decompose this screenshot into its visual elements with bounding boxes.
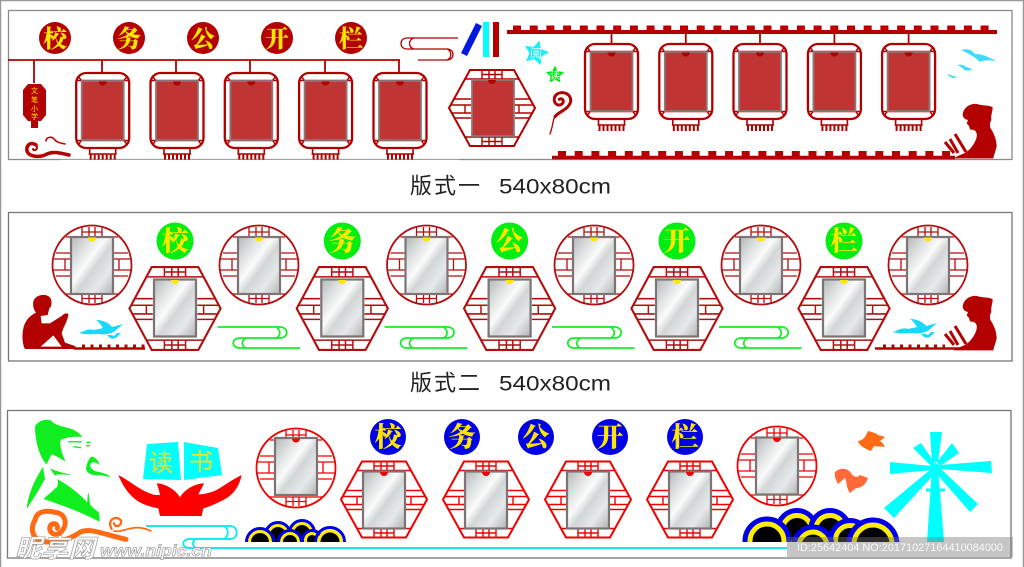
star badges: 读 bbox=[550, 69, 560, 82]
birds bbox=[947, 49, 997, 78]
green character beads: 公 bbox=[496, 226, 524, 256]
title band: red beads: 校 bbox=[43, 25, 69, 53]
blue character beads: 栏 bbox=[672, 422, 698, 452]
small lantern sign bbox=[23, 84, 46, 128]
round window frames bbox=[256, 426, 816, 508]
title band: red beads: 公 bbox=[191, 27, 216, 53]
wave scales right bbox=[742, 508, 900, 542]
title band: red beads: 务 bbox=[117, 26, 141, 53]
orange cloud bbox=[32, 511, 151, 542]
lanterns left row bbox=[76, 73, 426, 160]
round window frames bbox=[52, 226, 968, 304]
orange birds bbox=[835, 431, 885, 493]
title band: red beads: 开 bbox=[265, 26, 289, 53]
windmill bbox=[884, 432, 992, 542]
red swirl bbox=[550, 93, 571, 134]
scroll ornament bbox=[401, 38, 458, 60]
blue character beads: 公 bbox=[522, 422, 550, 452]
red cloud bbox=[27, 137, 69, 156]
book stripes bbox=[461, 22, 499, 57]
green character beads: 开 bbox=[664, 226, 690, 256]
small lantern sign: 笔 bbox=[31, 95, 38, 104]
caption one: 540x80cm bbox=[499, 176, 611, 198]
rail right bbox=[875, 346, 965, 348]
birds left bbox=[79, 320, 123, 339]
caption two: 540x80cm bbox=[499, 372, 611, 396]
green scrolls bbox=[218, 327, 802, 348]
caption one: 版式一 bbox=[410, 174, 482, 198]
cyan scroll bbox=[146, 526, 787, 548]
hexagon frame bbox=[449, 70, 535, 146]
panel: layout two bbox=[8, 212, 1012, 361]
blue character beads: 务 bbox=[448, 422, 476, 452]
open book bbox=[143, 442, 222, 480]
birds right bbox=[893, 319, 937, 338]
wave scales left bbox=[245, 519, 346, 542]
frame bottom mask bbox=[60, 160, 460, 166]
red lotus bbox=[118, 475, 242, 516]
scholar figure bbox=[27, 420, 111, 522]
small lantern sign: 学 bbox=[31, 112, 38, 121]
blue character beads bbox=[370, 419, 703, 455]
panel: layout one bbox=[8, 10, 1012, 166]
blue character beads: 开 bbox=[596, 422, 624, 452]
green character beads bbox=[156, 222, 862, 260]
boy reading silhouette bbox=[22, 295, 77, 349]
open book: 读 bbox=[149, 450, 173, 477]
watermark id bar: ID:25642404 NO:20171027164410084000 bbox=[797, 542, 1003, 554]
blue character beads: 校 bbox=[374, 422, 404, 452]
watermark logo: www.nipic.cn bbox=[100, 543, 212, 560]
girl reading silhouette bbox=[945, 296, 997, 350]
caption one bbox=[410, 174, 611, 198]
open book: 书 bbox=[189, 449, 213, 476]
bottom rail bbox=[552, 154, 955, 158]
small lantern sign: 文 bbox=[31, 86, 38, 95]
small lantern sign: 小 bbox=[31, 104, 38, 113]
hexagon frames bbox=[129, 267, 890, 350]
title band: red beads bbox=[39, 22, 367, 54]
girl reading silhouette bbox=[945, 104, 997, 158]
hanging rail right bbox=[507, 28, 997, 44]
green character beads: 校 bbox=[162, 226, 192, 256]
panel: layout three bbox=[8, 410, 1013, 567]
hanging rail left bbox=[8, 60, 400, 83]
rail left bbox=[74, 346, 145, 348]
title band: red beads: 栏 bbox=[339, 26, 363, 53]
watermark logo: 昵享网 bbox=[15, 535, 99, 563]
hexagon frames bbox=[341, 462, 733, 538]
green character beads: 务 bbox=[329, 226, 356, 256]
lanterns right row bbox=[585, 44, 935, 131]
watermark logo bbox=[15, 535, 212, 563]
star badges bbox=[521, 37, 564, 83]
star badges: 阅 bbox=[530, 46, 542, 60]
caption two: 版式二 bbox=[410, 370, 482, 396]
green character beads: 栏 bbox=[830, 226, 858, 256]
watermark id bar bbox=[787, 537, 1013, 557]
caption two bbox=[410, 370, 611, 396]
